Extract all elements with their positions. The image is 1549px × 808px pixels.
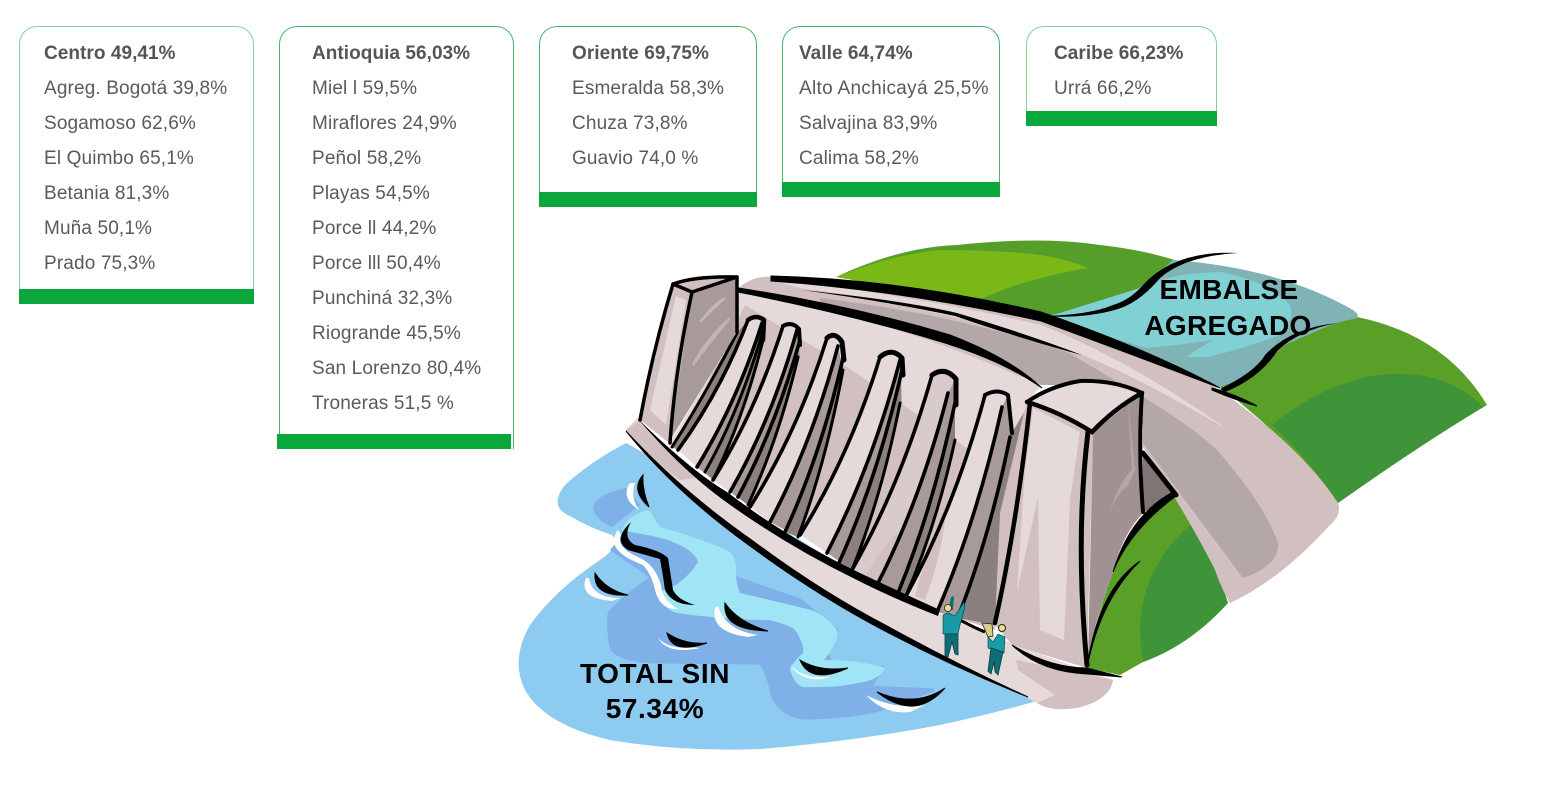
arch crest <box>738 277 1339 603</box>
footer bar: Centro <box>19 289 254 304</box>
panel: Centro <box>19 26 254 304</box>
text block: Caribe list: Caribe 66,23% <box>1054 43 1184 64</box>
text block: Centro list: Muña 50,1% <box>44 218 152 239</box>
crest and reservoir outlines <box>738 253 1337 406</box>
text block: Antioquia list: Miel l 59,5% <box>312 78 417 99</box>
text block: Centro list: Betania 81,3% <box>44 183 169 204</box>
text block: Centro list: Sogamoso 62,6% <box>44 113 196 134</box>
text block: Antioquia list: Troneras 51,5 % <box>312 393 454 414</box>
text block: Valle list: Calima 58,2% <box>799 148 919 169</box>
text block: Centro list: El Quimbo 65,1% <box>44 148 194 169</box>
label: TOTAL SIN <box>580 658 730 724</box>
footer bar: Caribe <box>1026 111 1217 126</box>
hill: right green <box>1220 317 1487 503</box>
text block: Antioquia list: Porce ll 44,2% <box>312 218 436 239</box>
buttress 6 <box>905 391 1012 617</box>
text block: Antioquia list: Porce lll 50,4% <box>312 253 441 274</box>
text block: Oriente list: Oriente 69,75% <box>572 43 709 64</box>
text block: Antioquia list: Punchiná 32,3% <box>312 288 452 309</box>
dam face <box>641 290 1041 630</box>
footer bar: Antioquia <box>277 434 511 449</box>
text block: Oriente list: Esmeralda 58,3% <box>572 78 724 99</box>
right pier <box>995 381 1176 677</box>
text block: Centro list: Centro 49,41% <box>44 43 176 64</box>
text block: Valle list: Valle 64,74% <box>799 43 913 64</box>
label: EMBALSE AGREGADO <box>1144 274 1312 341</box>
panel: Caribe <box>1026 26 1217 126</box>
text block: Centro list: Prado 75,3% <box>44 253 155 274</box>
panel: Oriente <box>539 26 757 207</box>
text block: Caribe list <box>1054 43 1184 99</box>
buttress 4 <box>800 353 902 570</box>
water <box>519 443 1040 750</box>
text block: Valle list: Alto Anchicayá 25,5% <box>799 78 989 99</box>
text block: Centro list <box>44 43 227 274</box>
buttress 1 <box>678 318 763 480</box>
footer bar: Oriente <box>539 192 757 207</box>
label: TOTAL SIN: 57.34% <box>606 693 704 724</box>
text block: Antioquia list: Playas 54,5% <box>312 183 430 204</box>
panel: Valle <box>782 26 1000 197</box>
wave marks <box>584 475 945 712</box>
text block: Oriente list <box>572 43 724 169</box>
hill: lower green <box>1087 493 1228 675</box>
buttress 3 <box>750 336 843 537</box>
text block: Antioquia list: Peñol 58,2% <box>312 148 421 169</box>
reservoir <box>1041 260 1358 387</box>
buttresses <box>672 317 1012 617</box>
label: EMBALSE AGREGADO: EMBALSE <box>1160 274 1298 305</box>
label: TOTAL SIN: TOTAL SIN <box>580 658 730 689</box>
text block: Antioquia list <box>312 43 481 414</box>
text block: Antioquia list: Riogrande 45,5% <box>312 323 461 344</box>
hill: top green <box>836 240 1181 317</box>
text block: Centro list: Agreg. Bogotá 39,8% <box>44 78 227 99</box>
label: EMBALSE AGREGADO: AGREGADO <box>1144 310 1312 341</box>
panel: Antioquia <box>279 26 514 449</box>
text block: Antioquia list: Miraflores 24,9% <box>312 113 457 134</box>
figure: worker two <box>982 623 1006 675</box>
illustration: hydroelectric dam <box>519 240 1487 750</box>
text block: Valle list <box>799 43 989 169</box>
buttress 2 <box>713 325 800 505</box>
buttress 5 <box>852 371 955 598</box>
figure: worker one <box>943 596 965 657</box>
text block: Antioquia list: San Lorenzo 80,4% <box>312 358 481 379</box>
text block: Valle list: Salvajina 83,9% <box>799 113 937 134</box>
text block: Caribe list: Urrá 66,2% <box>1054 78 1152 99</box>
ledge <box>626 418 1113 709</box>
text block: Oriente list: Chuza 73,8% <box>572 113 688 134</box>
footer bar: Valle <box>782 182 1000 197</box>
left pier <box>640 276 737 443</box>
text block: Oriente list: Guavio 74,0 % <box>572 148 698 169</box>
text block: Antioquia list: Antioquia 56,03% <box>312 43 470 64</box>
